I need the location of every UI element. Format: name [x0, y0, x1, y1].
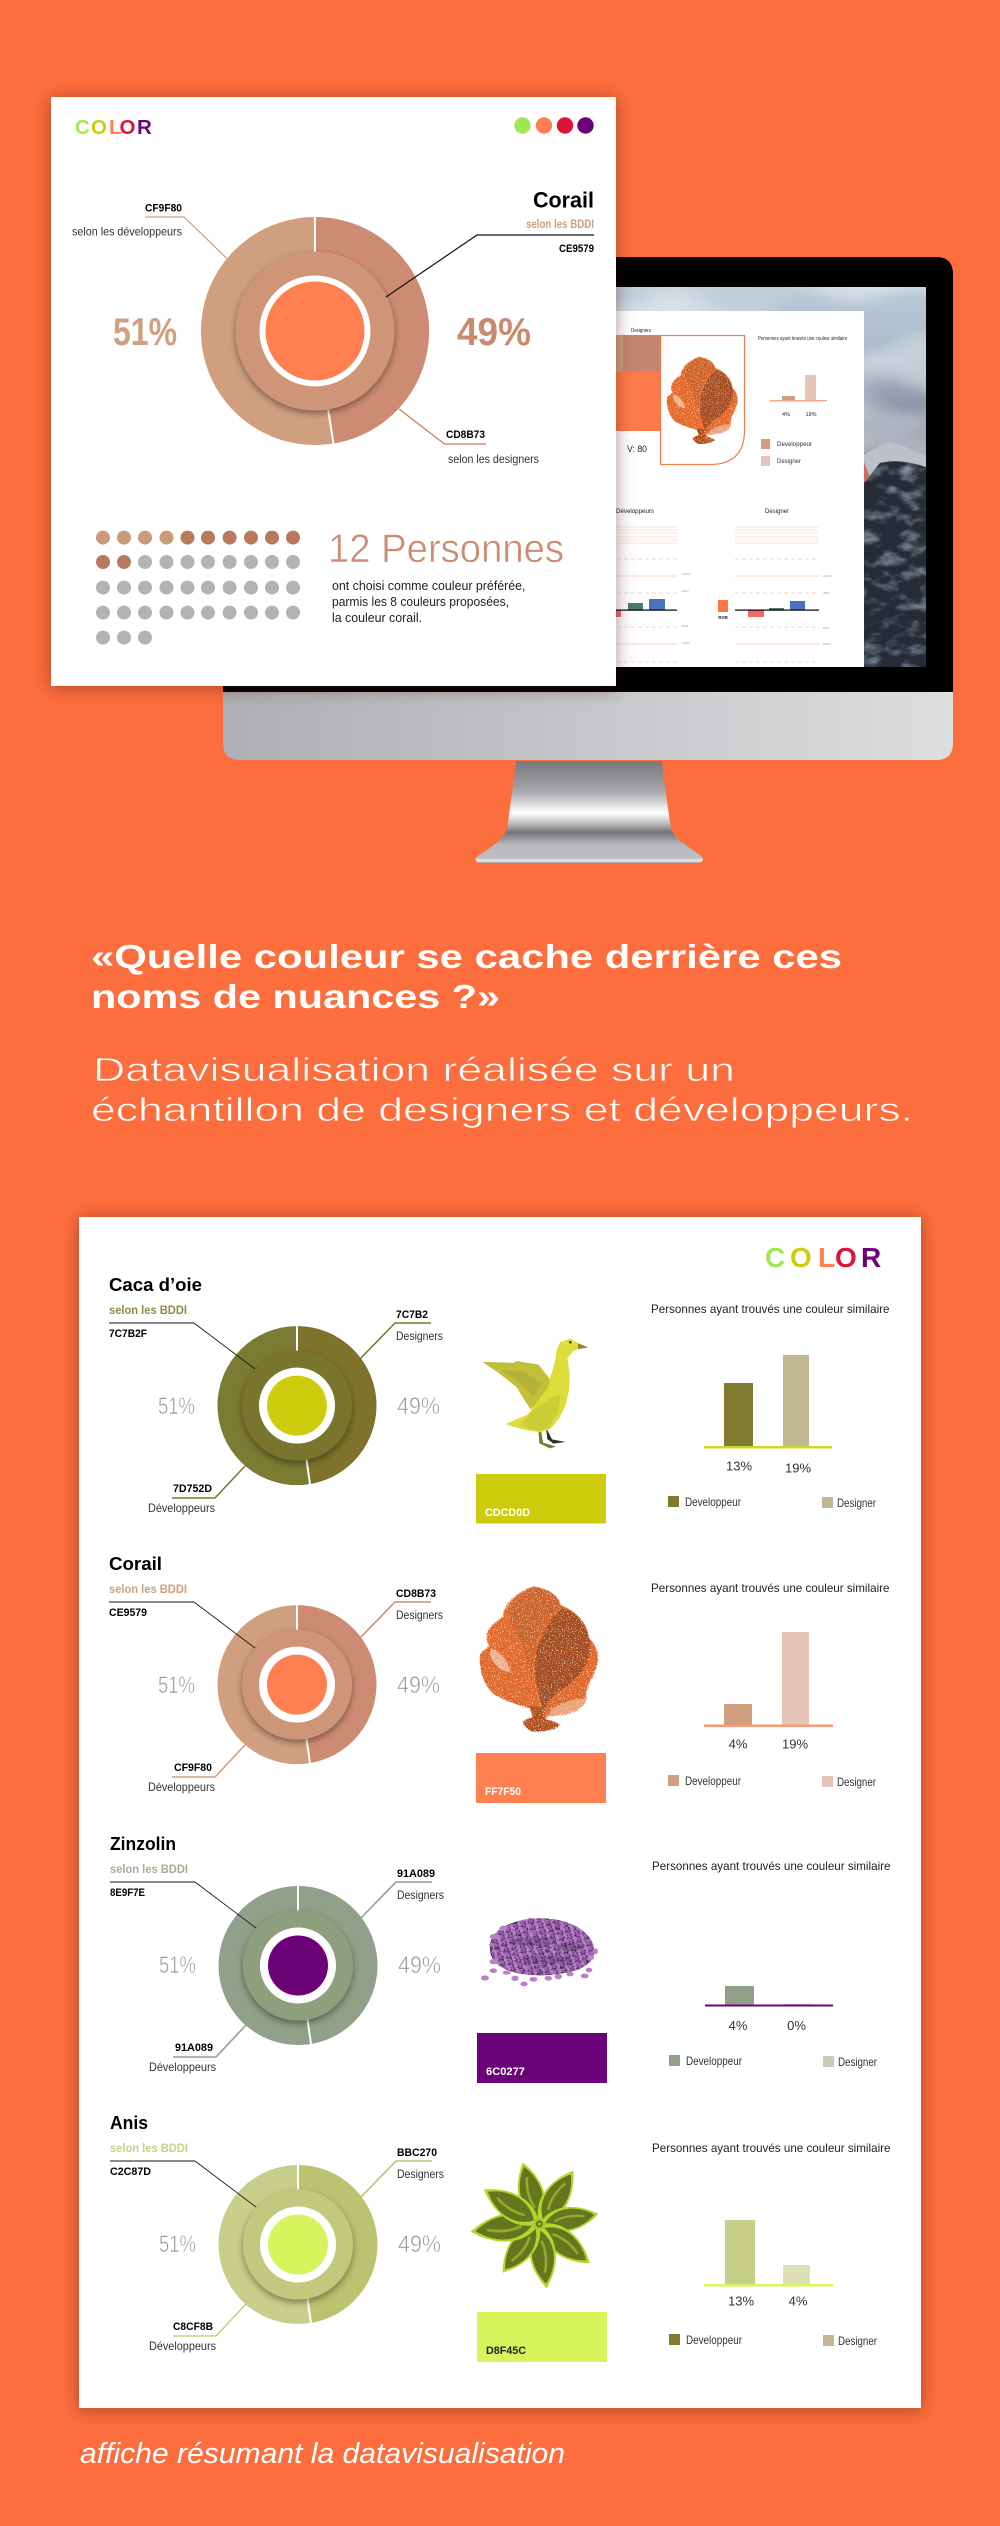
legend: Designer	[837, 1496, 876, 1510]
legend: Developpeur	[685, 1774, 741, 1788]
percentages	[158, 1393, 440, 1420]
developers mini chart: +100%	[681, 572, 691, 576]
title and labels: 8E9F7E	[110, 1887, 145, 1899]
designers mini chart: -100%	[822, 642, 831, 646]
chart title: Personnes ayant trouvés une couleur similaire	[652, 1859, 891, 1873]
section: Zinzolin	[110, 1834, 891, 2083]
logo: O	[91, 116, 107, 139]
percentages: 49%	[397, 1672, 440, 1699]
V value: V: 80	[627, 444, 647, 454]
percentages: 51%	[158, 1672, 195, 1699]
mini legend	[761, 439, 812, 466]
title and labels: 7D752D	[173, 1483, 212, 1495]
legend	[668, 1495, 876, 1510]
title and labels	[109, 1554, 443, 1794]
title and labels: selon les BDDI	[110, 1862, 188, 1876]
poster logo: O	[835, 1242, 857, 1273]
poster logo: L	[818, 1242, 835, 1273]
title and labels: 91A089	[397, 1868, 435, 1880]
title and labels: Zinzolin	[110, 1834, 176, 1854]
legend: Designer	[838, 2334, 877, 2348]
bar chart	[704, 1355, 832, 1476]
legend: Developpeur	[686, 2054, 742, 2068]
mini bar chart	[770, 375, 827, 418]
logo: O	[120, 116, 136, 139]
mini swatches	[610, 335, 660, 431]
mini chart title: Personnes ayant trouvés une couleur similaire	[758, 336, 847, 342]
donut	[218, 2165, 378, 2324]
percentages: 51%	[159, 2231, 196, 2258]
monitor bezel	[223, 257, 953, 692]
wallpaper	[600, 287, 926, 667]
percentages: 49%	[398, 2231, 441, 2258]
title and labels	[110, 1834, 444, 2074]
title and labels: Designers	[396, 1608, 443, 1622]
poster logo: C	[765, 1242, 785, 1273]
label designers: CD8B73	[446, 429, 485, 441]
swatch	[477, 2312, 607, 2362]
percentages	[158, 1672, 440, 1699]
legend: Designer	[838, 2055, 877, 2069]
bar chart: 13%	[728, 2294, 754, 2308]
swatch: 6C0277	[486, 2066, 525, 2078]
bar chart: 4%	[789, 2294, 808, 2308]
description: ont choisi comme couleur préférée,	[332, 579, 526, 593]
title and labels: Caca d’oie	[109, 1275, 202, 1295]
image: coral	[480, 1586, 598, 1732]
swatch: FF7F50	[485, 1786, 521, 1798]
label developers: CF9F80	[145, 203, 182, 215]
label designers	[399, 409, 539, 466]
poster logo: O	[790, 1242, 812, 1273]
logo: L	[109, 116, 122, 139]
title and labels: Développeurs	[148, 1780, 215, 1794]
title and labels: CE9579	[109, 1607, 147, 1619]
dot matrix	[96, 531, 300, 645]
subtitle	[91, 1051, 913, 1128]
swatch	[476, 1474, 606, 1524]
donut	[218, 1605, 376, 1764]
swatch	[476, 1753, 606, 1803]
title and labels: 7C7B2F	[109, 1328, 147, 1340]
legend: Designer	[837, 1775, 876, 1789]
title and labels: selon les BDDI	[109, 1303, 187, 1317]
mini legend: Developpeur	[777, 442, 812, 448]
title and labels: 7C7B2	[396, 1309, 428, 1321]
leader BDDI	[386, 235, 594, 297]
title and labels: Développeurs	[148, 1501, 215, 1515]
title and labels: Designers	[397, 1888, 444, 1902]
chart title: Personnes ayant trouvés une couleur similaire	[651, 1581, 890, 1595]
title and labels: CF9F80	[174, 1762, 212, 1774]
legend: Developpeur	[686, 2333, 742, 2347]
title and labels: C2C87D	[110, 2166, 151, 2178]
chart title: Personnes ayant trouvés une couleur similaire	[652, 2141, 891, 2155]
poster logo: R	[861, 1242, 881, 1273]
legend	[669, 2333, 877, 2348]
donut chart	[201, 217, 429, 445]
title and labels: 91A089	[175, 2042, 213, 2054]
percentages: 49%	[398, 1952, 441, 1979]
developers mini chart: Développeurs	[616, 509, 654, 515]
headline	[91, 938, 842, 1015]
developers mini chart	[610, 509, 691, 662]
bar chart: 4%	[729, 1736, 748, 1752]
bar chart	[705, 1986, 833, 2033]
monitor	[223, 257, 953, 863]
subtitle: Datavisualisation réalisée sur un	[93, 1051, 735, 1088]
title and labels: Développeurs	[149, 2339, 216, 2353]
bar chart: 0%	[787, 2018, 806, 2033]
label developers: selon les développeurs	[72, 225, 182, 239]
image: goose	[484, 1339, 588, 1448]
section: Corail	[109, 1554, 890, 1803]
description	[332, 579, 526, 625]
chart title: Personnes ayant trouvés une couleur similaire	[651, 1302, 890, 1316]
title and labels: Corail	[109, 1554, 162, 1574]
code CE9579: CE9579	[559, 243, 594, 255]
percentages: 49%	[397, 1393, 440, 1420]
developers mini chart: +50%	[681, 589, 689, 593]
image: grains	[481, 1918, 598, 1986]
designers mini chart: RVB	[718, 615, 728, 620]
donut	[218, 1886, 378, 2045]
description: la couleur corail.	[332, 611, 422, 625]
heading: 12 Personnes: 12 Personnes	[328, 527, 564, 571]
logo: C	[75, 116, 90, 139]
title and labels: BBC270	[397, 2147, 437, 2159]
developers mini chart: -100%	[681, 641, 690, 645]
percent 51: 51%	[113, 311, 177, 354]
designers label: Designers	[631, 328, 651, 334]
title and labels: Développeurs	[149, 2060, 216, 2074]
description: parmis les 8 couleurs proposées,	[332, 595, 509, 609]
headline: noms de nuances ?»	[91, 978, 500, 1015]
title and labels: Anis	[110, 2113, 148, 2133]
caption: affiche résumant la datavisualisation	[80, 2438, 565, 2470]
mini bar chart: 19%	[805, 412, 817, 418]
mini coral frame	[660, 336, 744, 464]
colour dots	[514, 117, 594, 134]
percentages: 51%	[159, 1952, 196, 1979]
title and labels: C8CF8B	[173, 2321, 213, 2333]
title and labels: selon les BDDI	[109, 1582, 187, 1596]
mini legend: Designer	[777, 459, 801, 465]
title and labels: selon les BDDI	[110, 2141, 188, 2155]
developers mini chart: -50%	[681, 624, 688, 628]
bar chart: 19%	[782, 1736, 808, 1752]
image: star anise	[469, 2159, 601, 2290]
bar chart: 13%	[726, 1458, 752, 1474]
monitor stand	[475, 761, 703, 863]
panel: poster	[79, 1217, 921, 2408]
monitor chin	[223, 690, 953, 760]
headline: «Quelle couleur se cache derrière ces	[91, 938, 842, 975]
label designers: selon les designers	[448, 452, 539, 466]
designers mini chart: +100%	[822, 574, 832, 578]
legend	[668, 1774, 876, 1789]
swatch	[477, 2033, 607, 2083]
donut	[218, 1326, 376, 1485]
swatch: D8F45C	[486, 2345, 526, 2357]
section: Anis	[110, 2113, 891, 2362]
subtitle: échantillon de designers et développeurs.	[91, 1091, 913, 1128]
bar chart: 4%	[729, 2018, 748, 2033]
logo: R	[137, 116, 152, 139]
title and labels: Designers	[396, 1329, 443, 1343]
title and labels	[109, 1275, 443, 1515]
bar chart: 19%	[785, 1460, 811, 1476]
title and labels: CD8B73	[396, 1588, 436, 1600]
percent 49: 49%	[457, 311, 531, 354]
swatch: CDCD0D	[485, 1507, 530, 1519]
document on screen	[600, 311, 864, 667]
legend: Developpeur	[685, 1495, 741, 1509]
legend	[669, 2054, 877, 2069]
mini bar chart: 4%	[782, 412, 790, 418]
percentages	[159, 1952, 441, 1979]
percentages: 51%	[158, 1393, 195, 1420]
bar chart	[704, 2220, 833, 2308]
label: selon les BDDI: selon les BDDI	[526, 217, 594, 231]
designers mini chart: Designer	[765, 509, 789, 515]
label developers	[72, 203, 227, 259]
mini coral image	[667, 357, 738, 444]
designers mini chart	[718, 509, 832, 662]
percentages	[159, 2231, 441, 2258]
section: Caca d'oie	[109, 1275, 890, 1524]
designers mini chart: +50%	[822, 591, 830, 595]
title and labels	[110, 2113, 444, 2353]
title and labels: Designers	[397, 2167, 444, 2181]
designers mini chart: -50%	[822, 626, 829, 630]
bar chart	[704, 1632, 833, 1752]
panel: corail card	[51, 97, 616, 686]
heading: Corail: Corail	[533, 188, 594, 212]
